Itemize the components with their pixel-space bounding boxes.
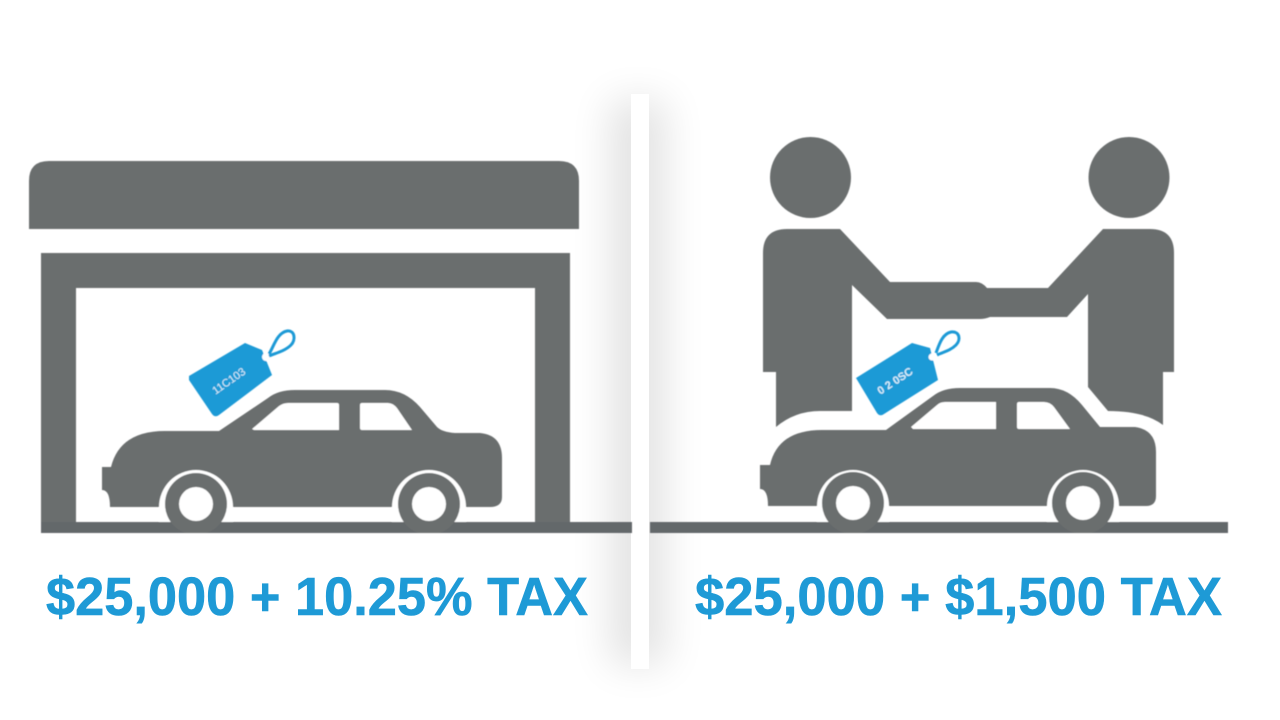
price label: dealership: $25,000 + 10.25% TAX bbox=[46, 567, 588, 627]
price label: private sale: $25,000 + $1,500 TAX bbox=[695, 567, 1222, 627]
icon: price tag right: 0 2 0SC bbox=[875, 366, 915, 397]
ground line: right bbox=[650, 522, 1228, 533]
handshake figures bbox=[763, 229, 1174, 427]
divider bbox=[610, 94, 666, 669]
icon: price tag left: 11C103 bbox=[210, 366, 248, 397]
person: right head bbox=[1088, 137, 1170, 218]
icon: price tag right bbox=[856, 332, 959, 415]
garage frame bbox=[41, 253, 570, 533]
icon: price tag left bbox=[189, 331, 294, 416]
panel: dealership bbox=[29, 161, 632, 535]
car: dealership bbox=[102, 390, 502, 535]
garage roof bbox=[29, 161, 579, 229]
person: left head bbox=[770, 137, 851, 218]
ground line: left bbox=[41, 522, 632, 533]
panel: private sale bbox=[650, 137, 1228, 534]
car: private sale bbox=[760, 388, 1156, 534]
